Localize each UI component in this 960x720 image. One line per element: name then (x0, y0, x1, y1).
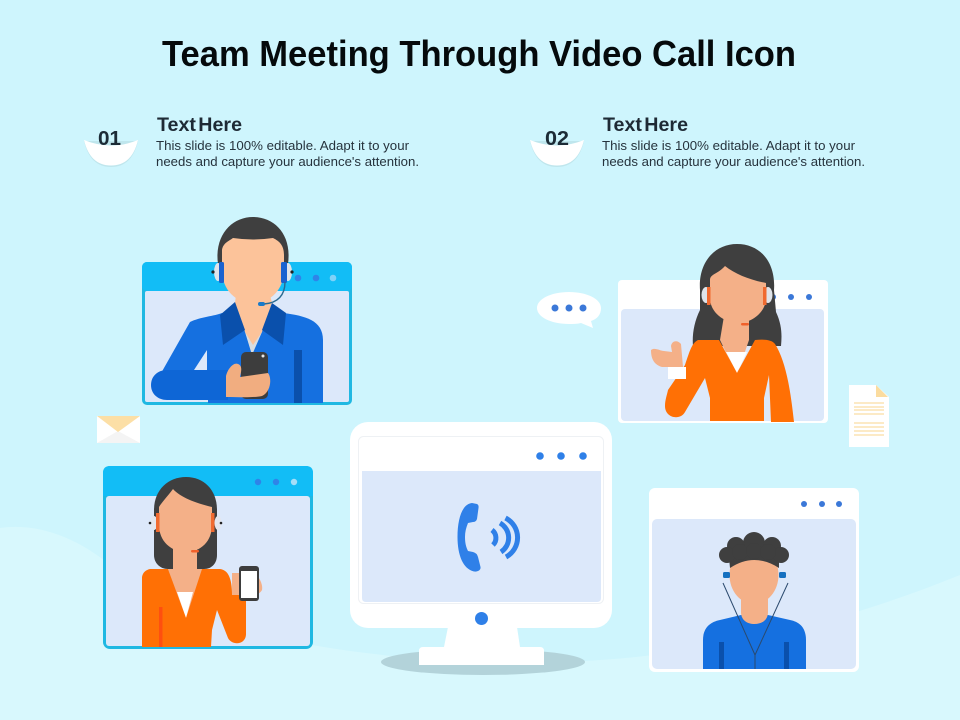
window dots (295, 275, 336, 281)
icon: phone handset (458, 503, 481, 572)
body 01: needs and capture your audience's attention. (156, 155, 419, 169)
monitor body (350, 422, 612, 628)
icon: envelope (97, 416, 140, 443)
icon: document (849, 385, 889, 447)
badge 01 (84, 140, 138, 167)
number 01: 01 (98, 128, 121, 150)
monitor screen (362, 471, 601, 602)
body 02: needs and capture your audience's attention. (602, 155, 865, 169)
man figure (151, 217, 323, 403)
monitor shadow (381, 649, 585, 675)
video window: man with earphones (649, 488, 859, 672)
badge 02 (530, 140, 584, 167)
window dots (801, 501, 842, 507)
video window: woman gesturing (618, 244, 828, 423)
body 02: This slide is 100% editable. Adapt it to your (602, 139, 855, 153)
man figure (703, 532, 806, 669)
speech bubble (537, 292, 601, 328)
monitor (350, 422, 612, 675)
video window: man with headset (142, 217, 352, 405)
monitor dots (536, 452, 587, 460)
window frame (618, 280, 828, 423)
window dots (255, 479, 297, 485)
woman figure (142, 477, 262, 647)
number 02: 02 (545, 128, 569, 150)
heading 02: Text Here (603, 115, 688, 136)
heading 01: Text Here (157, 115, 242, 136)
window frame (142, 262, 352, 405)
monitor stand (419, 627, 544, 665)
window dots (770, 294, 812, 300)
window frame (649, 488, 859, 672)
body 01: This slide is 100% editable. Adapt it to your (156, 139, 409, 153)
item 02 (530, 115, 865, 169)
video window: woman with phone (103, 466, 313, 649)
power button (475, 612, 488, 625)
window frame (103, 466, 313, 649)
woman figure (651, 244, 794, 422)
title: Team Meeting Through Video Call Icon (162, 33, 796, 74)
item 01 (84, 115, 419, 169)
icon: sound waves (492, 518, 518, 557)
